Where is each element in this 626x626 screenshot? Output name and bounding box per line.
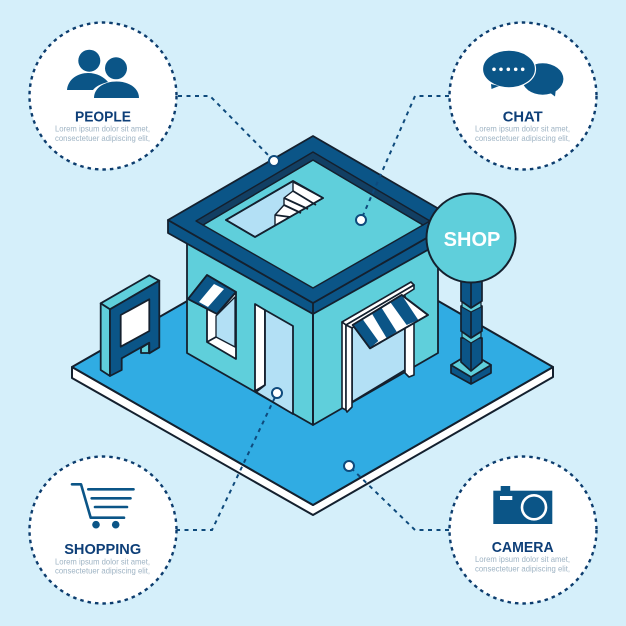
- icon: chat bubbles: [482, 50, 563, 96]
- shop sign: SHOP: [444, 229, 500, 251]
- description: shopping: Lorem ipsum dolor sit amet,: [55, 556, 150, 566]
- description: chat: consectetuer adipiscing elit,: [475, 133, 570, 143]
- panel: chat: [450, 22, 596, 170]
- billboard: [101, 275, 159, 376]
- description: camera: Lorem ipsum dolor sit amet,: [475, 554, 570, 564]
- storefront awning: [353, 295, 428, 348]
- storefront glass: [352, 296, 405, 402]
- isometric platform: [72, 229, 553, 515]
- shop sign post: [451, 278, 491, 384]
- heading: shopping: SHOPPING: [64, 541, 141, 558]
- panel: camera: [450, 456, 596, 604]
- roof: [168, 136, 458, 314]
- description: people: consectetuer adipiscing elit,: [55, 133, 150, 143]
- connector: people: [178, 96, 274, 161]
- heading: people: PEOPLE: [75, 109, 131, 126]
- shop building: [168, 136, 458, 425]
- icon: people: [67, 50, 139, 98]
- marker: shopping: [272, 388, 282, 398]
- left window: [207, 293, 236, 359]
- description: people: Lorem ipsum dolor sit amet,: [55, 124, 150, 134]
- heading: chat: CHAT: [503, 109, 543, 126]
- window awning: [188, 275, 236, 314]
- roof stair opening: [226, 181, 323, 237]
- icon: shopping cart: [72, 484, 134, 528]
- shop sign: [426, 194, 516, 282]
- panel: people: [30, 22, 176, 170]
- storefront frame: [342, 282, 414, 412]
- marker: camera: [344, 461, 354, 471]
- marker: chat: [356, 215, 366, 225]
- description: shopping: consectetuer adipiscing elit,: [55, 566, 150, 576]
- connector: camera: [349, 466, 449, 530]
- connector: chat: [361, 96, 449, 220]
- sign base: [451, 353, 491, 384]
- marker: people: [269, 156, 279, 166]
- description: chat: Lorem ipsum dolor sit amet,: [475, 124, 570, 134]
- connector: shopping: [176, 393, 277, 530]
- right wall: [313, 240, 438, 425]
- door: [255, 304, 293, 414]
- description: camera: consectetuer adipiscing elit,: [475, 564, 570, 574]
- panel: shopping: [30, 456, 176, 604]
- left wall: [187, 240, 313, 425]
- heading: camera: CAMERA: [492, 539, 554, 556]
- icon: camera: [493, 486, 552, 524]
